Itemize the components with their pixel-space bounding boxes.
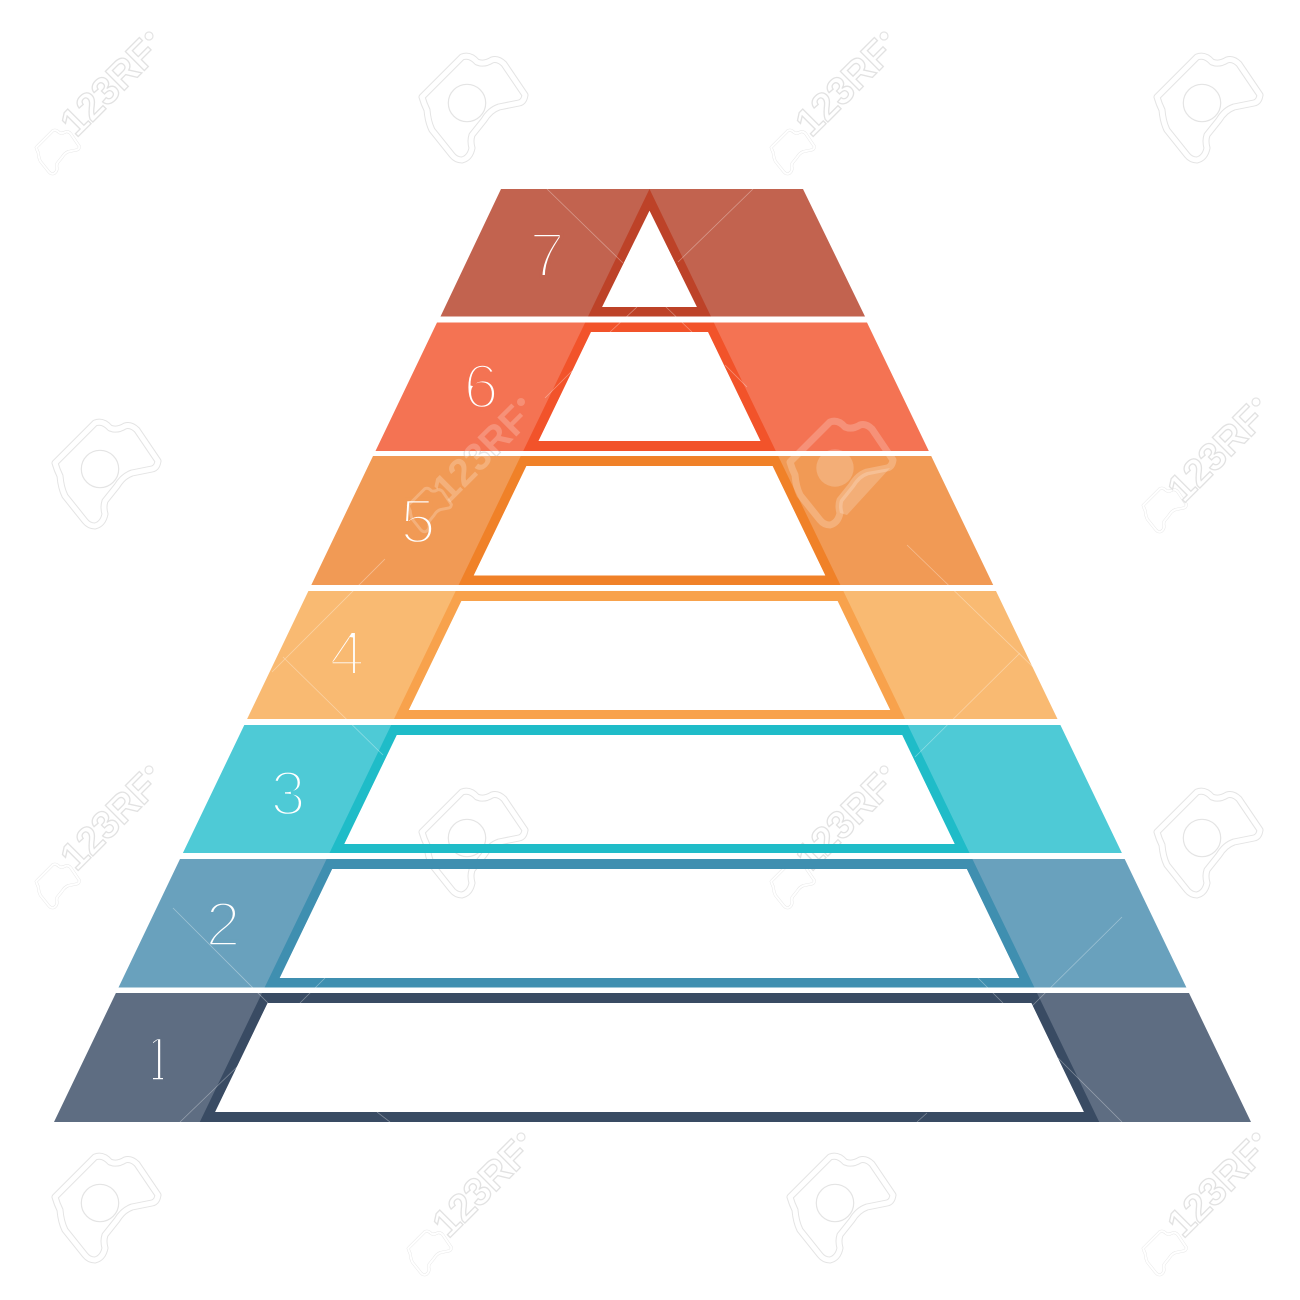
frame 4 [394, 591, 905, 719]
watermark: logo bottom left [55, 1156, 158, 1260]
number 1: 1 [140, 1025, 176, 1095]
overlay: logo on tiers 5 and 6 [790, 421, 893, 525]
frame 7 [588, 189, 711, 316]
watermark: logo top right [1157, 56, 1260, 160]
overlay: wordmark on tiers 5 and 6: 123RF [424, 397, 538, 511]
watermark: wordmark lower centre: 123RF [787, 765, 901, 879]
number 7: 7 [529, 221, 565, 291]
number 4: 4 [329, 619, 365, 689]
frame 3 [330, 725, 970, 853]
watermark: wordmark lower centre [771, 765, 901, 908]
tier 4 [247, 591, 1058, 719]
watermark: wordmark bottom right: 123RF [1159, 1132, 1273, 1246]
watermark: logo lower right [1157, 791, 1260, 895]
band 4 [247, 591, 1058, 719]
number 2: 2 [205, 890, 241, 960]
watermark: logo middle left [55, 422, 158, 526]
watermark: logo lower centre [422, 791, 525, 895]
band 1 [54, 993, 1251, 1122]
frame 5 [459, 456, 840, 585]
watermark: wordmark top centre [771, 31, 901, 174]
band 2 [118, 859, 1186, 988]
band 7 [440, 189, 865, 316]
frame 6 [523, 322, 776, 451]
watermark: wordmark lower left [36, 765, 166, 908]
band 3 [183, 725, 1122, 853]
watermark: wordmark top left: 123RF [52, 31, 166, 145]
tier 5 [311, 456, 993, 585]
watermark: wordmark bottom right [1143, 1132, 1273, 1275]
watermark overlays on the coloured tiers [408, 397, 893, 532]
frame 1 [200, 993, 1099, 1122]
watermark: wordmark middle centre: 123RF [424, 397, 538, 511]
number 5: 5 [400, 487, 436, 557]
watermark: wordmark top left [36, 31, 166, 174]
tier 1 [54, 993, 1251, 1122]
tier 3 [183, 725, 1122, 853]
watermark: wordmark bottom centre: 123RF [424, 1132, 538, 1246]
watermark: logo top centre [422, 56, 525, 160]
watermark: logo bottom centre [790, 1156, 893, 1260]
watermark: wordmark top centre: 123RF [787, 31, 901, 145]
watermark: wordmark bottom centre [408, 1132, 538, 1275]
tier 6 [376, 322, 929, 451]
number 6: 6 [463, 352, 499, 422]
watermark: wordmark middle right: 123RF [1159, 397, 1273, 511]
watermark: wordmark lower left: 123RF [52, 765, 166, 879]
tier 2 [118, 859, 1186, 988]
number 3: 3 [270, 759, 306, 829]
frame 2 [265, 859, 1034, 988]
band 5 [311, 456, 993, 585]
pyramid [54, 189, 1251, 1122]
band 6 [376, 322, 929, 451]
tier 7 [440, 189, 865, 316]
